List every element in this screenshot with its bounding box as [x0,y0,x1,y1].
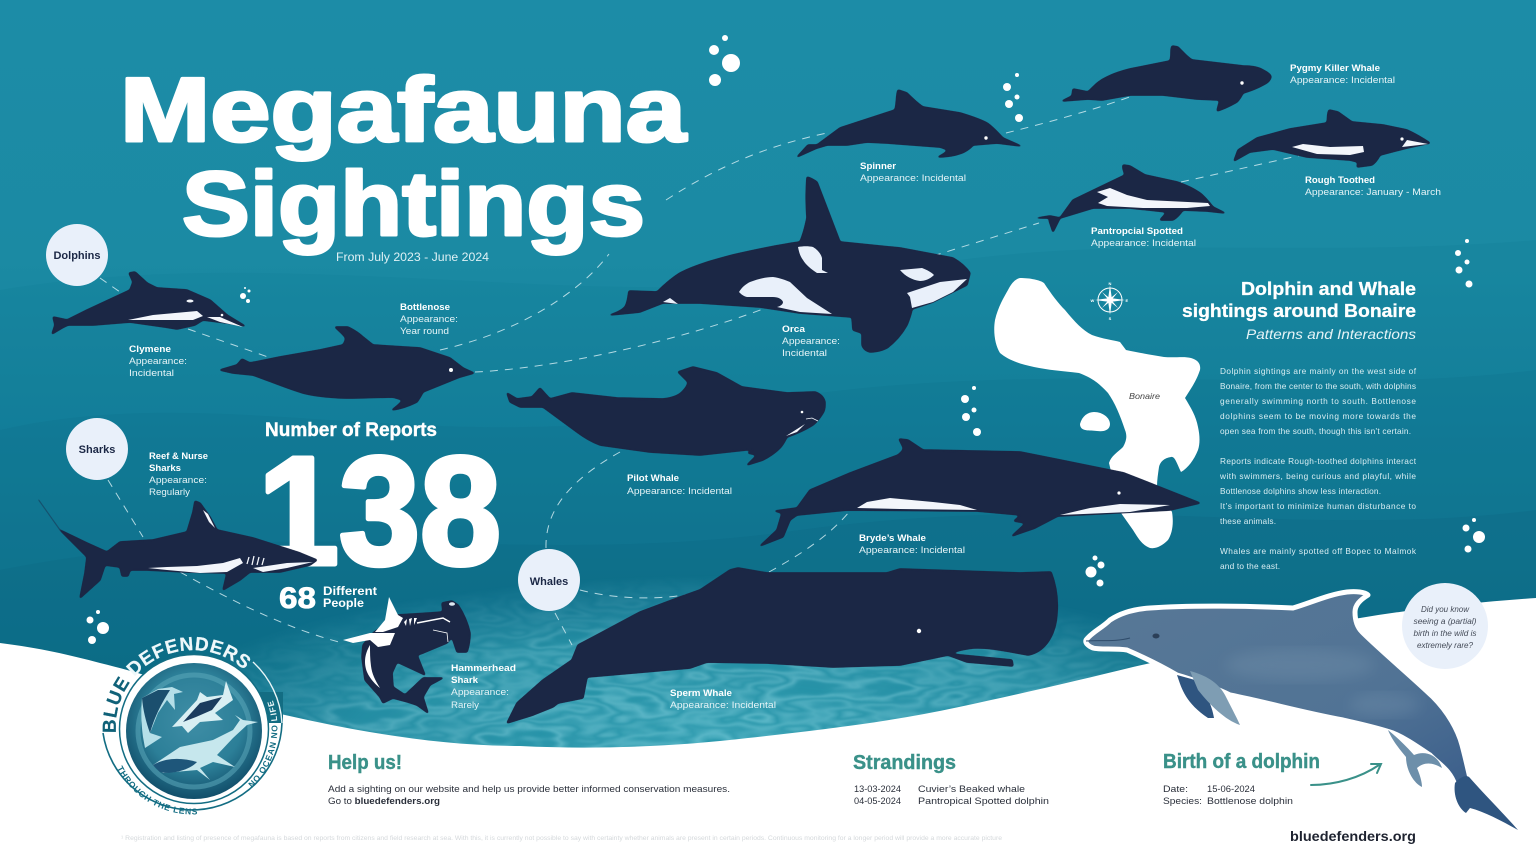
callout: did you know: extremely rare? [1417,641,1474,650]
label: Pygmy Killer Whale: Appearance: Incidental [1290,75,1395,86]
section: Strandings: Strandings [853,752,956,774]
section: Help us [328,752,730,807]
label: Reef and Nurse Sharks: Regularly [149,487,190,498]
section: Strandings [853,752,1049,807]
label: Bryde's Whale: Appearance: Incidental [859,545,965,556]
label: Reef and Nurse Sharks [149,451,208,498]
category bubble: Sharks: Sharks [79,444,115,456]
animal: Sperm Whale [507,568,1057,723]
footnote: ¹ Registration and listing of presence of megafauna is based on reports from citizens and field research at sea. With this, it is currently not possible to say with certainty whether animals are present in certain periods. Continuous monitoring for a longer period will provide a more accurate picture [121,836,1003,842]
section: Help us: Add a sighting on our website and help us provide better informed conservation measures. [328,784,730,795]
label: Pantropical Spotted: Appearance: Incidental [1091,238,1196,249]
bubbles [86,35,1485,644]
label: Hammerhead Shark: Hammerhead [451,663,516,674]
different people count: Different [323,586,377,598]
label: Rough Toothed: Appearance: January - March [1305,187,1441,198]
label: Clymene: Appearance: [129,356,187,367]
sea floor light caustics [235,586,1150,748]
section: Strandings: 04-05-2024 [854,796,901,807]
label: Bottlenose [400,302,458,337]
label: Rough Toothed: Rough Toothed [1305,175,1375,186]
section: Strandings: Cuvier’s Beaked whale [918,784,1025,795]
icon: compass rose: W [1090,298,1094,303]
label: Hammerhead Shark [451,663,516,711]
label: Pantropical Spotted: Pantropcial Spotted [1091,226,1183,237]
subtitle date range: From July 2023 - June 2024 [336,252,490,264]
label: Rough Toothed [1305,175,1441,198]
callout: did you know: Did you know [1421,605,1470,614]
label: Spinner [860,161,966,184]
map: Klein Bonaire [1080,412,1110,431]
heading: sightings around Bonaire: Patterns and Interactions [1246,326,1416,342]
callout: did you know [1402,583,1488,669]
animal: Shark [38,499,317,598]
label: Pygmy Killer Whale: Pygmy Killer Whale [1290,63,1380,74]
section: Birth of a dolphin: Date: [1163,784,1188,795]
icon: compass rose: N [1109,281,1112,286]
category bubble: Whales [518,549,580,611]
label: Sperm Whale [670,688,776,711]
label: Clymene: Clymene [129,344,171,355]
text block: sightings description: Reports indicate Rough-toothed dolphins interact [1220,456,1417,466]
animal: Pilot Whale [507,367,825,465]
arrow to newborn dolphin [1311,764,1381,785]
text block: sightings description: Dolphin sightings are mainly on the west side of [1220,366,1417,376]
heading: sightings around Bonaire: Dolphin and Whale [1241,278,1416,299]
different people count: People [323,598,364,610]
section: Birth of a dolphin: 15-06-2024 [1207,784,1255,795]
photo: dolphin giving birth [1086,592,1518,830]
label: Bryde's Whale [859,533,965,556]
label: Bryde's Whale: Bryde’s Whale [859,533,926,544]
heading: sightings around Bonaire [1182,278,1416,342]
logo: Blue Defenders badge: BLUE DEFENDERS [102,636,250,732]
text block: sightings description: these animals. [1220,516,1276,526]
label: Orca: Incidental [782,348,827,359]
title: Sightings [182,154,645,255]
text block: sightings description: Whales are mainly spotted off Bopec to Malmok [1220,546,1417,556]
logo: Blue Defenders badge: NO OCEAN NO LIFE [248,700,278,788]
different people count [279,582,377,615]
label: Bottlenose: Year round [400,326,449,337]
section: Strandings: Pantropical Spotted dolphin [918,796,1049,807]
section: Birth of a dolphin: Bottlenose dolphin [1207,796,1293,807]
number of reports heading: Number of Reports [265,420,437,441]
section: Help us: Go to bluedefenders.org [328,796,440,807]
label: Pilot Whale: Pilot Whale [627,473,679,484]
text block: sightings description: and to the east. [1220,561,1280,571]
label: Pygmy Killer Whale [1290,63,1395,86]
callout: did you know: seeing a (partial) [1414,617,1477,626]
icon: compass rose [1090,281,1128,321]
label: Orca: Orca [782,324,806,335]
icon: compass rose: S [1109,316,1112,321]
label: Clymene: Incidental [129,368,174,379]
category bubble: Whales: Whales [530,576,568,588]
title: Megafauna [120,60,688,161]
callout: did you know: birth in the wild is [1414,629,1476,638]
animal: Bryde's Whale [760,439,1200,546]
label: Orca [782,324,840,359]
big number 138: 138 [258,425,501,597]
section: Birth of a dolphin: Birth of a dolphin [1163,751,1320,773]
label: Bottlenose: Bottlenose [400,302,450,313]
text block: sightings description: dolphins seem to be moving more towards the [1220,411,1416,421]
label: Orca: Appearance: [782,336,840,347]
label: Spinner: Spinner [860,161,896,172]
text block: sightings description: It’s important to minimize human disturbance to [1220,501,1416,511]
text block: sightings description: generally swimming north to south. Bottlenose [1220,396,1416,406]
label: Hammerhead Shark: Rarely [451,700,479,711]
label: Hammerhead Shark: Appearance: [451,687,509,698]
heading: sightings around Bonaire: sightings around Bonaire [1182,300,1416,321]
logo: Blue Defenders badge [102,636,283,814]
label: Pilot Whale: Appearance: Incidental [627,486,732,497]
animal: Spinner dolphin [797,90,1021,157]
text block: sightings description [1219,366,1417,571]
label: Pilot Whale [627,473,732,497]
animal: Pantropical Spotted dolphin [1037,165,1225,232]
different people count: 68 [279,582,316,615]
section: Strandings: 13-03-2024 [854,784,901,795]
white lower panel wave [0,598,1536,864]
animal: Orca [610,177,970,352]
text block: sightings description: open sea from the south, though this isn’t certain. [1220,426,1411,436]
label: Bottlenose: Appearance: [400,314,458,325]
website link: bluedefenders.org [1290,828,1416,844]
animal: Clymene dolphin [52,272,245,334]
text block: sightings description: Bonaire, from the center to the south, with dolphins [1220,381,1416,391]
label: Reef and Nurse Sharks: Reef & Nurse [149,451,208,462]
label: Hammerhead Shark: Shark [451,675,479,686]
category bubble: Dolphins: Dolphins [53,250,101,262]
label: Sperm Whale: Sperm Whale [670,688,732,699]
animal: Hammerhead Shark [343,597,470,713]
label: Sperm Whale: Appearance: Incidental [670,700,776,711]
title [120,60,688,255]
dashed connector lines [100,95,1302,645]
text block: sightings description: Bottlenose dolphins show less interaction. [1220,486,1381,496]
label: Pantropical Spotted [1091,226,1196,249]
label: Reef and Nurse Sharks: Sharks [149,463,181,474]
map label: Bonaire [1129,391,1160,401]
label: Spinner: Appearance: Incidental [860,173,966,184]
section: Birth of a dolphin [1163,751,1320,807]
animal: Pygmy Killer Whale [1062,46,1271,111]
animal: Rough Toothed dolphin [1234,110,1430,167]
text block: sightings description: with swimmers, being curious and playful, while [1219,471,1416,481]
category bubble: Sharks [66,418,128,480]
label: Reef and Nurse Sharks: Appearance: [149,475,207,486]
animal: Bottlenose dolphin [220,327,474,410]
section: Help us: Help us! [328,752,402,774]
logo: Blue Defenders badge: THROUGH THE LENS [118,765,198,814]
map: Bonaire [994,278,1200,548]
label: Clymene [129,344,187,379]
section: Birth of a dolphin: Species: [1163,796,1202,807]
icon: compass rose: E [1126,298,1128,303]
category bubble: Dolphins [46,224,108,286]
